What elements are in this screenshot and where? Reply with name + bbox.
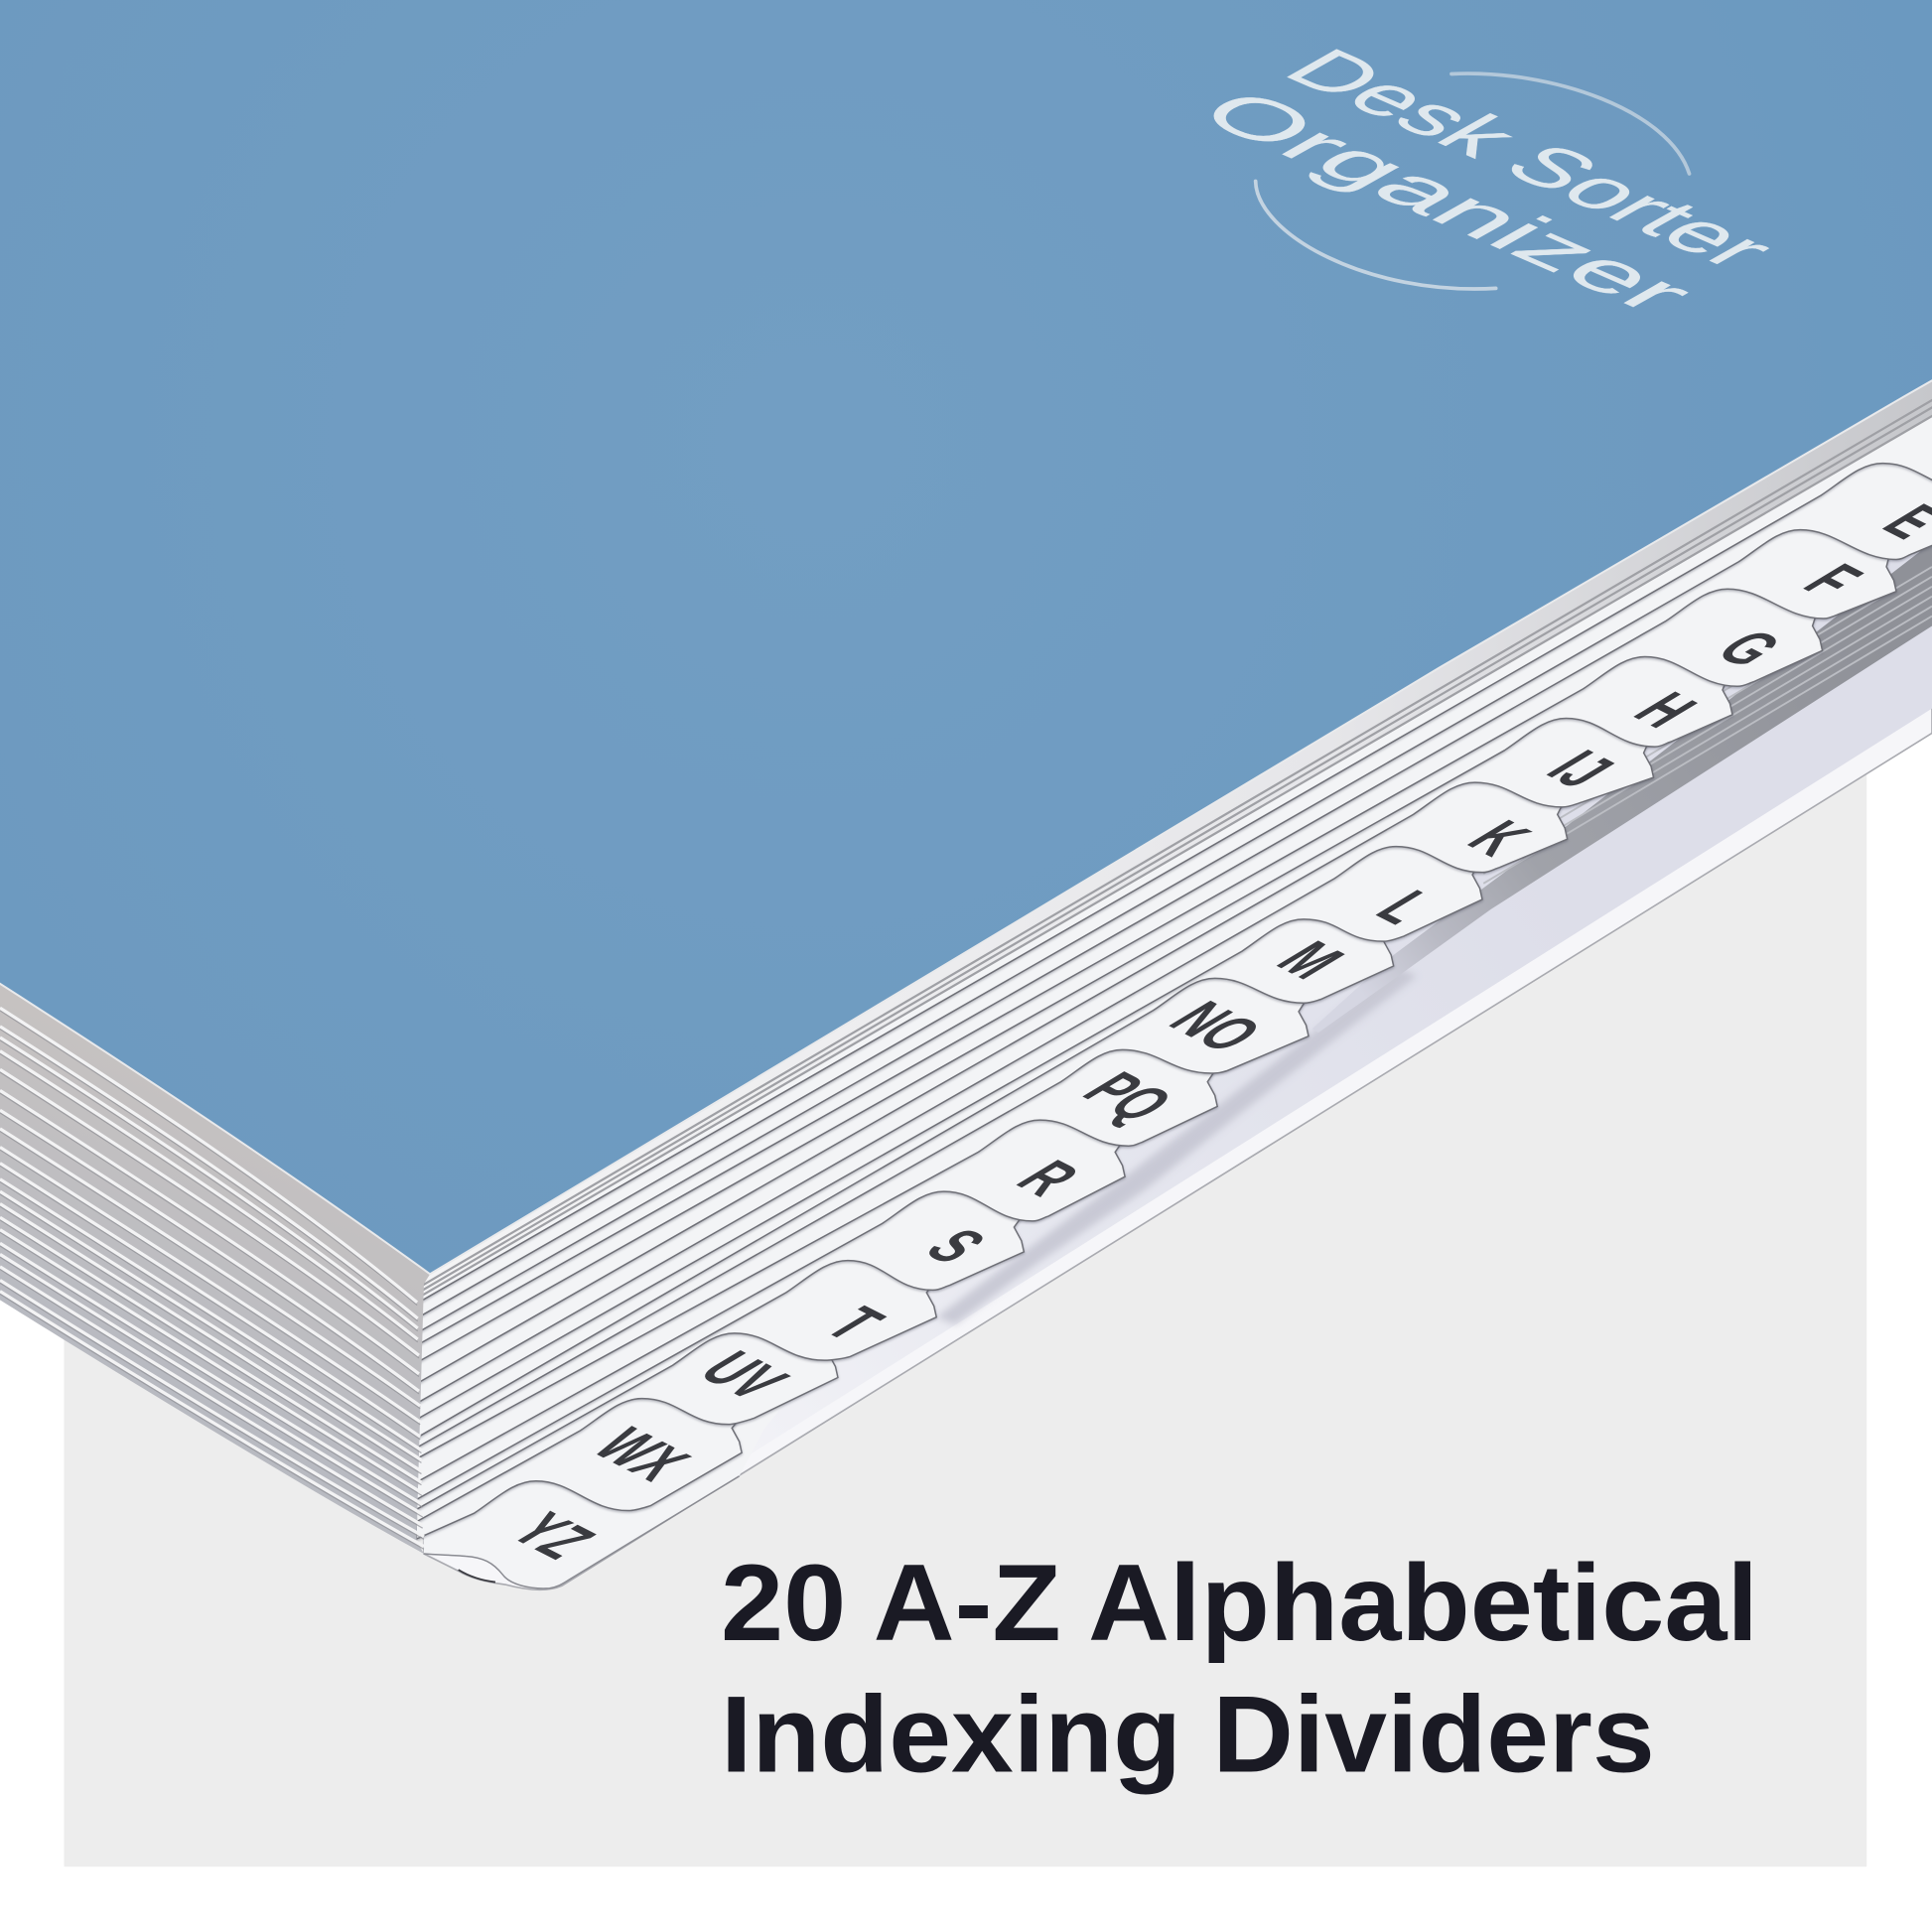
tab: NO: NO xyxy=(1153,992,1279,1061)
tab: cropped upper tab xyxy=(369,0,1932,1304)
logo text line 1: Desk Sorter xyxy=(1265,38,1797,279)
heading xyxy=(721,1543,1758,1796)
tab: T: T xyxy=(809,1298,900,1350)
cover logo: Desk Sorter Organizer xyxy=(1178,38,1797,324)
heading line 1: 20 A-Z Alphabetical xyxy=(721,1543,1758,1664)
tab: UV: UV xyxy=(683,1341,804,1410)
logo arc top xyxy=(1451,73,1690,174)
left side stack of sheets xyxy=(0,983,430,1554)
logo text line 2: Organizer xyxy=(1178,79,1717,324)
tab: IJ: IJ xyxy=(1530,741,1630,798)
tab: WX: WX xyxy=(577,1418,706,1490)
stacked divider edges under the tabs xyxy=(1312,542,1932,1033)
tab: R: R xyxy=(1001,1151,1096,1205)
divider tabs xyxy=(369,0,1932,1588)
tab: YZ xyxy=(369,0,1932,1588)
tab: G: G xyxy=(1701,621,1798,676)
tab: S: S xyxy=(908,1219,1003,1273)
heading line 2: Indexing Dividers xyxy=(721,1675,1655,1796)
tab: PQ: PQ xyxy=(1066,1062,1189,1132)
blue cover xyxy=(0,0,1932,1274)
logo arc bottom xyxy=(1256,181,1496,289)
tab: F: F xyxy=(1787,554,1878,607)
tab: H: H xyxy=(1617,683,1713,738)
tab: K: K xyxy=(1451,811,1547,866)
tab: L: L xyxy=(1360,881,1450,933)
product: back sheet xyxy=(419,369,1932,1589)
soft shadows under tab ends xyxy=(936,966,1417,1324)
upper sheet edges xyxy=(369,0,1932,1299)
tab: YZ: YZ xyxy=(494,1503,612,1569)
tab: M: M xyxy=(1261,931,1360,989)
